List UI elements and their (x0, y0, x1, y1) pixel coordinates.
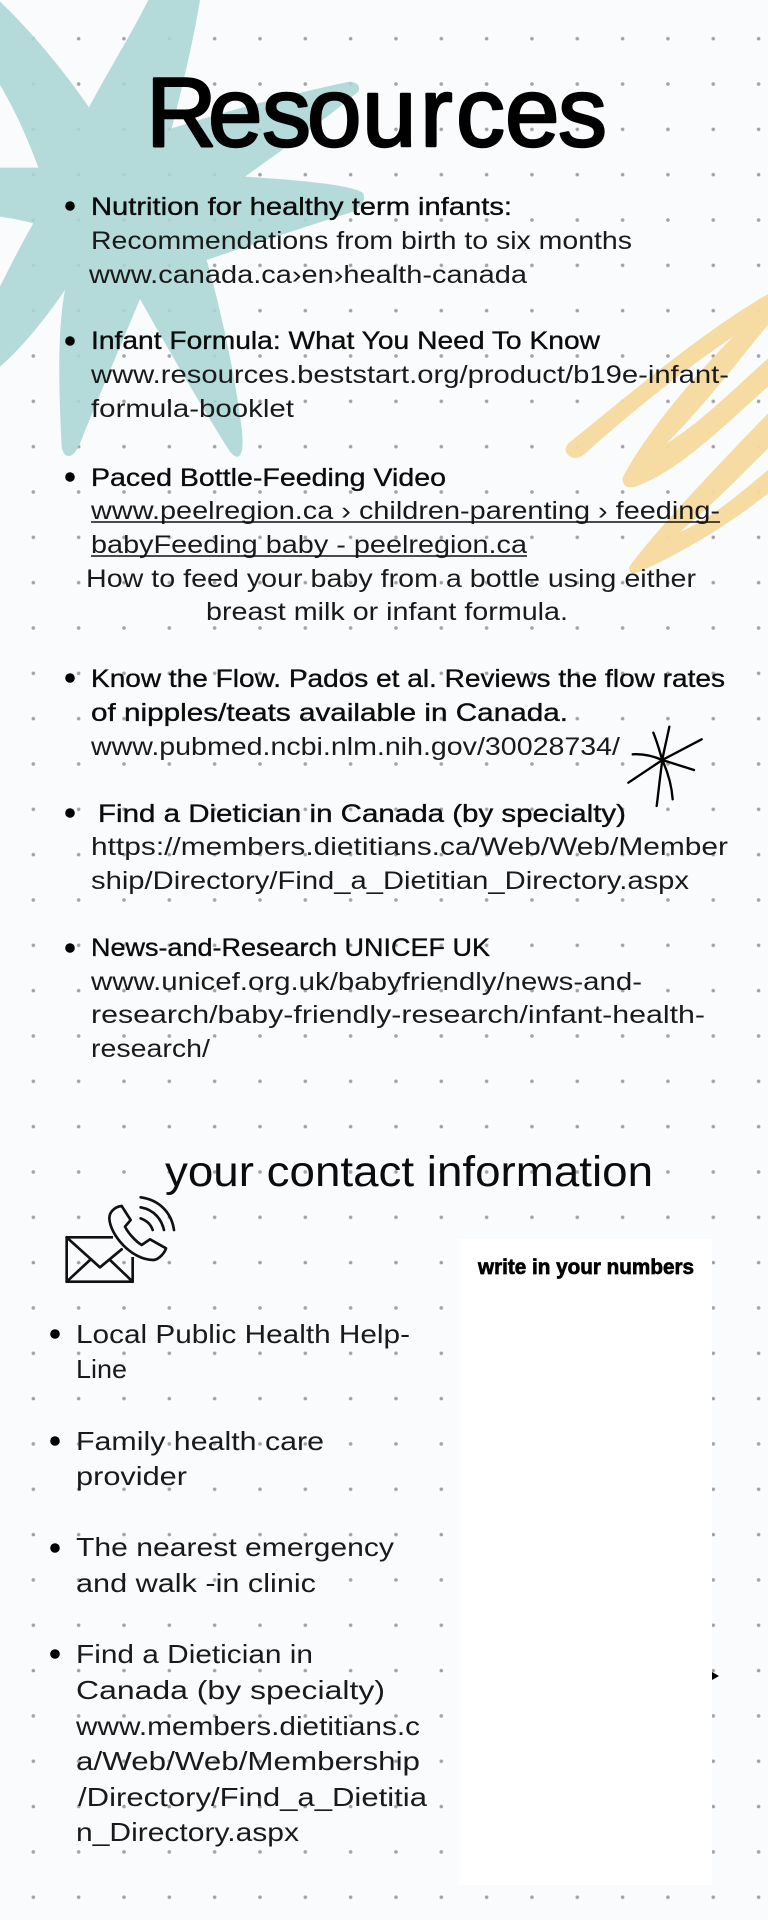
resource: nutrition for healthy term infants: Recommendations from birth to six months (91, 227, 632, 255)
contact: local public health help-line: Line (76, 1354, 127, 1384)
decoration: yellow scribble (566, 294, 768, 573)
icon: small chevron (712, 1672, 719, 1680)
resource: infant formula (65, 327, 729, 423)
resource: paced bottle-feeding video: babyFeeding baby - peelregion.ca (91, 531, 527, 559)
icon: envelope and phone (67, 1197, 174, 1282)
resource: know the flow: of nipples/teats available in Canada. (91, 699, 568, 727)
contact: find a dietician: /Directory/Find_a_Dietitia (78, 1782, 428, 1812)
resource: unicef news and research: research/baby-friendly-research/infant-health- (91, 1001, 705, 1029)
contact: find a dietician: Canada (by specialty) (76, 1675, 385, 1705)
contact: family health care provider (50, 1426, 324, 1491)
icon: envelope (67, 1237, 133, 1282)
resource: unicef news and research: News-and-Research UNICEF UK (91, 934, 490, 962)
resource: find a dietician: https://members.dietitians.ca/Web/Web/Member (91, 833, 728, 861)
resource: paced bottle-feeding video (65, 464, 720, 626)
resource: nutrition for healthy term infants: Nutrition for healthy term infants: (91, 193, 512, 221)
decoration: teal star shape (0, 0, 364, 457)
contact list (50, 1319, 428, 1847)
resource: know the flow: www.pubmed.ncbi.nlm.nih.gov/30028734/ (90, 733, 620, 761)
resource: paced bottle-feeding video: How to feed your baby from a bottle using either (86, 565, 696, 593)
resource: nutrition for healthy term infants: www.canada.ca›en›health-canada (88, 261, 527, 289)
contact: find a dietician: www.members.dietitians.c (75, 1711, 420, 1741)
contact: nearest emergency and walk-in clinic (50, 1532, 394, 1598)
contact: family health care provider: provider (76, 1461, 187, 1491)
contact: local public health help-line (50, 1319, 410, 1384)
contact: find a dietician: n_Directory.aspx (76, 1817, 299, 1847)
resource: find a dietician: ship/Directory/Find_a_Dietitian_Directory.aspx (91, 867, 690, 895)
resource: know the flow (65, 665, 725, 761)
resource: nutrition for healthy term infants (65, 193, 632, 289)
resource: paced bottle-feeding video: breast milk or infant formula. (206, 598, 568, 626)
resource: paced bottle-feeding video: www.peelregion.ca › children-parenting › feeding- (90, 497, 720, 525)
contact: family health care provider: Family health care (76, 1426, 324, 1456)
contact: find a dietician (50, 1639, 428, 1847)
resource: paced bottle-feeding video: Paced Bottle-Feeding Video (91, 464, 446, 492)
panel heading: write in your numbers (477, 1256, 694, 1279)
resource: infant formula: www.resources.beststart.org/product/b19e-infant- (90, 361, 729, 389)
resource: unicef news and research: research/ (91, 1035, 210, 1063)
panel: write in your numbers (459, 1239, 712, 1885)
heading: your contact information: your contact information (165, 1148, 653, 1196)
resource list (65, 193, 729, 1063)
contact: nearest emergency and walk-in clinic: The nearest emergency (76, 1532, 394, 1562)
resource: find a dietician: Find a Dietician in Canada (by specialty) (98, 800, 626, 828)
contact: local public health help-line: Local Public Health Help- (76, 1319, 410, 1349)
resource: infant formula: Infant Formula: What You Need To Know (91, 327, 601, 355)
resource: know the flow: Know the Flow. Pados et al. Reviews the flow rates (91, 665, 725, 693)
resource: unicef news and research (65, 934, 705, 1063)
contact: find a dietician: Find a Dietician in (76, 1639, 313, 1669)
resource: unicef news and research: www.unicef.org.uk/babyfriendly/news-and- (90, 968, 642, 996)
resource: infant formula: formula-booklet (91, 395, 294, 423)
icon: phone handset (109, 1197, 174, 1260)
contact: nearest emergency and walk-in clinic: and walk -in clinic (76, 1568, 316, 1598)
icon: hand-drawn asterisk (628, 727, 702, 806)
title: Resources (146, 57, 607, 167)
contact: find a dietician: a/Web/Web/Membership (76, 1746, 420, 1776)
resource: find a dietician (65, 800, 728, 895)
